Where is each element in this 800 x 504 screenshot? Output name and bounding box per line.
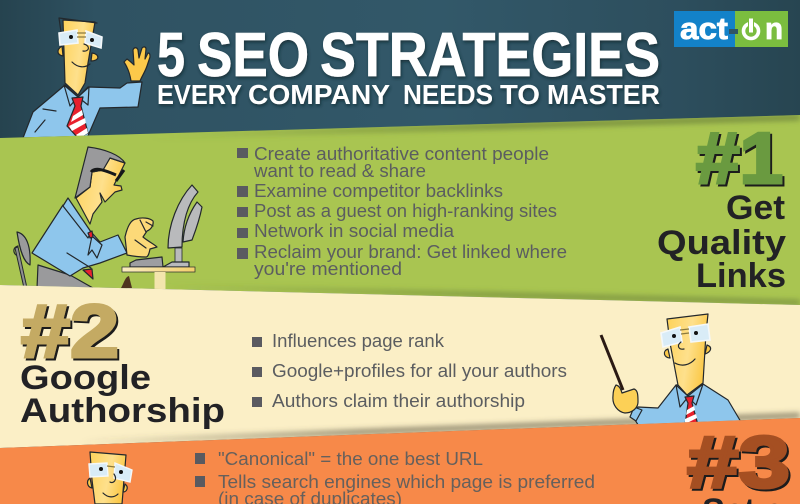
icon: act-on logo: act (680, 11, 728, 46)
panel: #1 get quality links (0, 115, 800, 305)
icon: act-on logo (674, 11, 788, 47)
bullet list: authorship: Google+profiles for all your authors (272, 361, 567, 381)
title (157, 21, 660, 110)
number #2: #2 (21, 289, 119, 373)
icon: man head (88, 452, 132, 504)
panel: header (0, 0, 800, 140)
heading: google authorship: Authorship (20, 392, 225, 430)
title: 5 (157, 21, 185, 90)
bullet list: link tactics: want to read & share (253, 161, 426, 181)
bullet list: link tactics: Reclaim your brand: Get linked where (254, 242, 567, 262)
title: EVERY (157, 79, 242, 110)
bullet list: link tactics (237, 144, 567, 279)
heading: get quality links: Quality (657, 224, 786, 262)
title: SEO (197, 21, 309, 90)
icon: man with pointer (601, 314, 741, 428)
title: NEEDS (403, 79, 493, 110)
bullet list: link tactics: Create authoritative content people (254, 144, 549, 164)
bullet list: authorship: Authors claim their authorship (272, 391, 525, 411)
bullet list: canonical (195, 449, 595, 504)
heading: get quality links: Links (696, 257, 786, 295)
bullet list: canonical: "Canonical" = the one best URL (218, 449, 483, 469)
bullet list: link tactics: Network in social media (254, 221, 455, 241)
number #1: #1 (696, 119, 783, 199)
panel: #3 set a canonical (0, 418, 800, 504)
bullet list: authorship (252, 331, 567, 411)
heading: get quality links: Get (726, 189, 785, 227)
bullet list: link tactics: Post as a guest on high-ranking sites (254, 201, 557, 221)
bullet list: link tactics: Examine competitor backlinks (254, 181, 503, 201)
title: MASTER (547, 79, 660, 110)
bullet list: canonical: Tells search engines which page is preferred (218, 472, 595, 492)
title: COMPANY (248, 79, 390, 110)
icon: man typing at computer (14, 147, 202, 292)
heading: google authorship: Google (20, 359, 151, 397)
bullet list: authorship: Influences page rank (272, 331, 445, 351)
panel: #2 google authorship (0, 285, 800, 448)
heading: get quality links (657, 189, 786, 295)
title: TO (500, 79, 540, 110)
title: STRATEGIES (320, 21, 660, 90)
bullet list: link tactics: you're mentioned (254, 259, 402, 279)
number #3: #3 (687, 422, 790, 503)
icon: act-on logo: n (765, 11, 783, 46)
icon: waving man (23, 18, 150, 138)
heading: google authorship (20, 359, 225, 430)
